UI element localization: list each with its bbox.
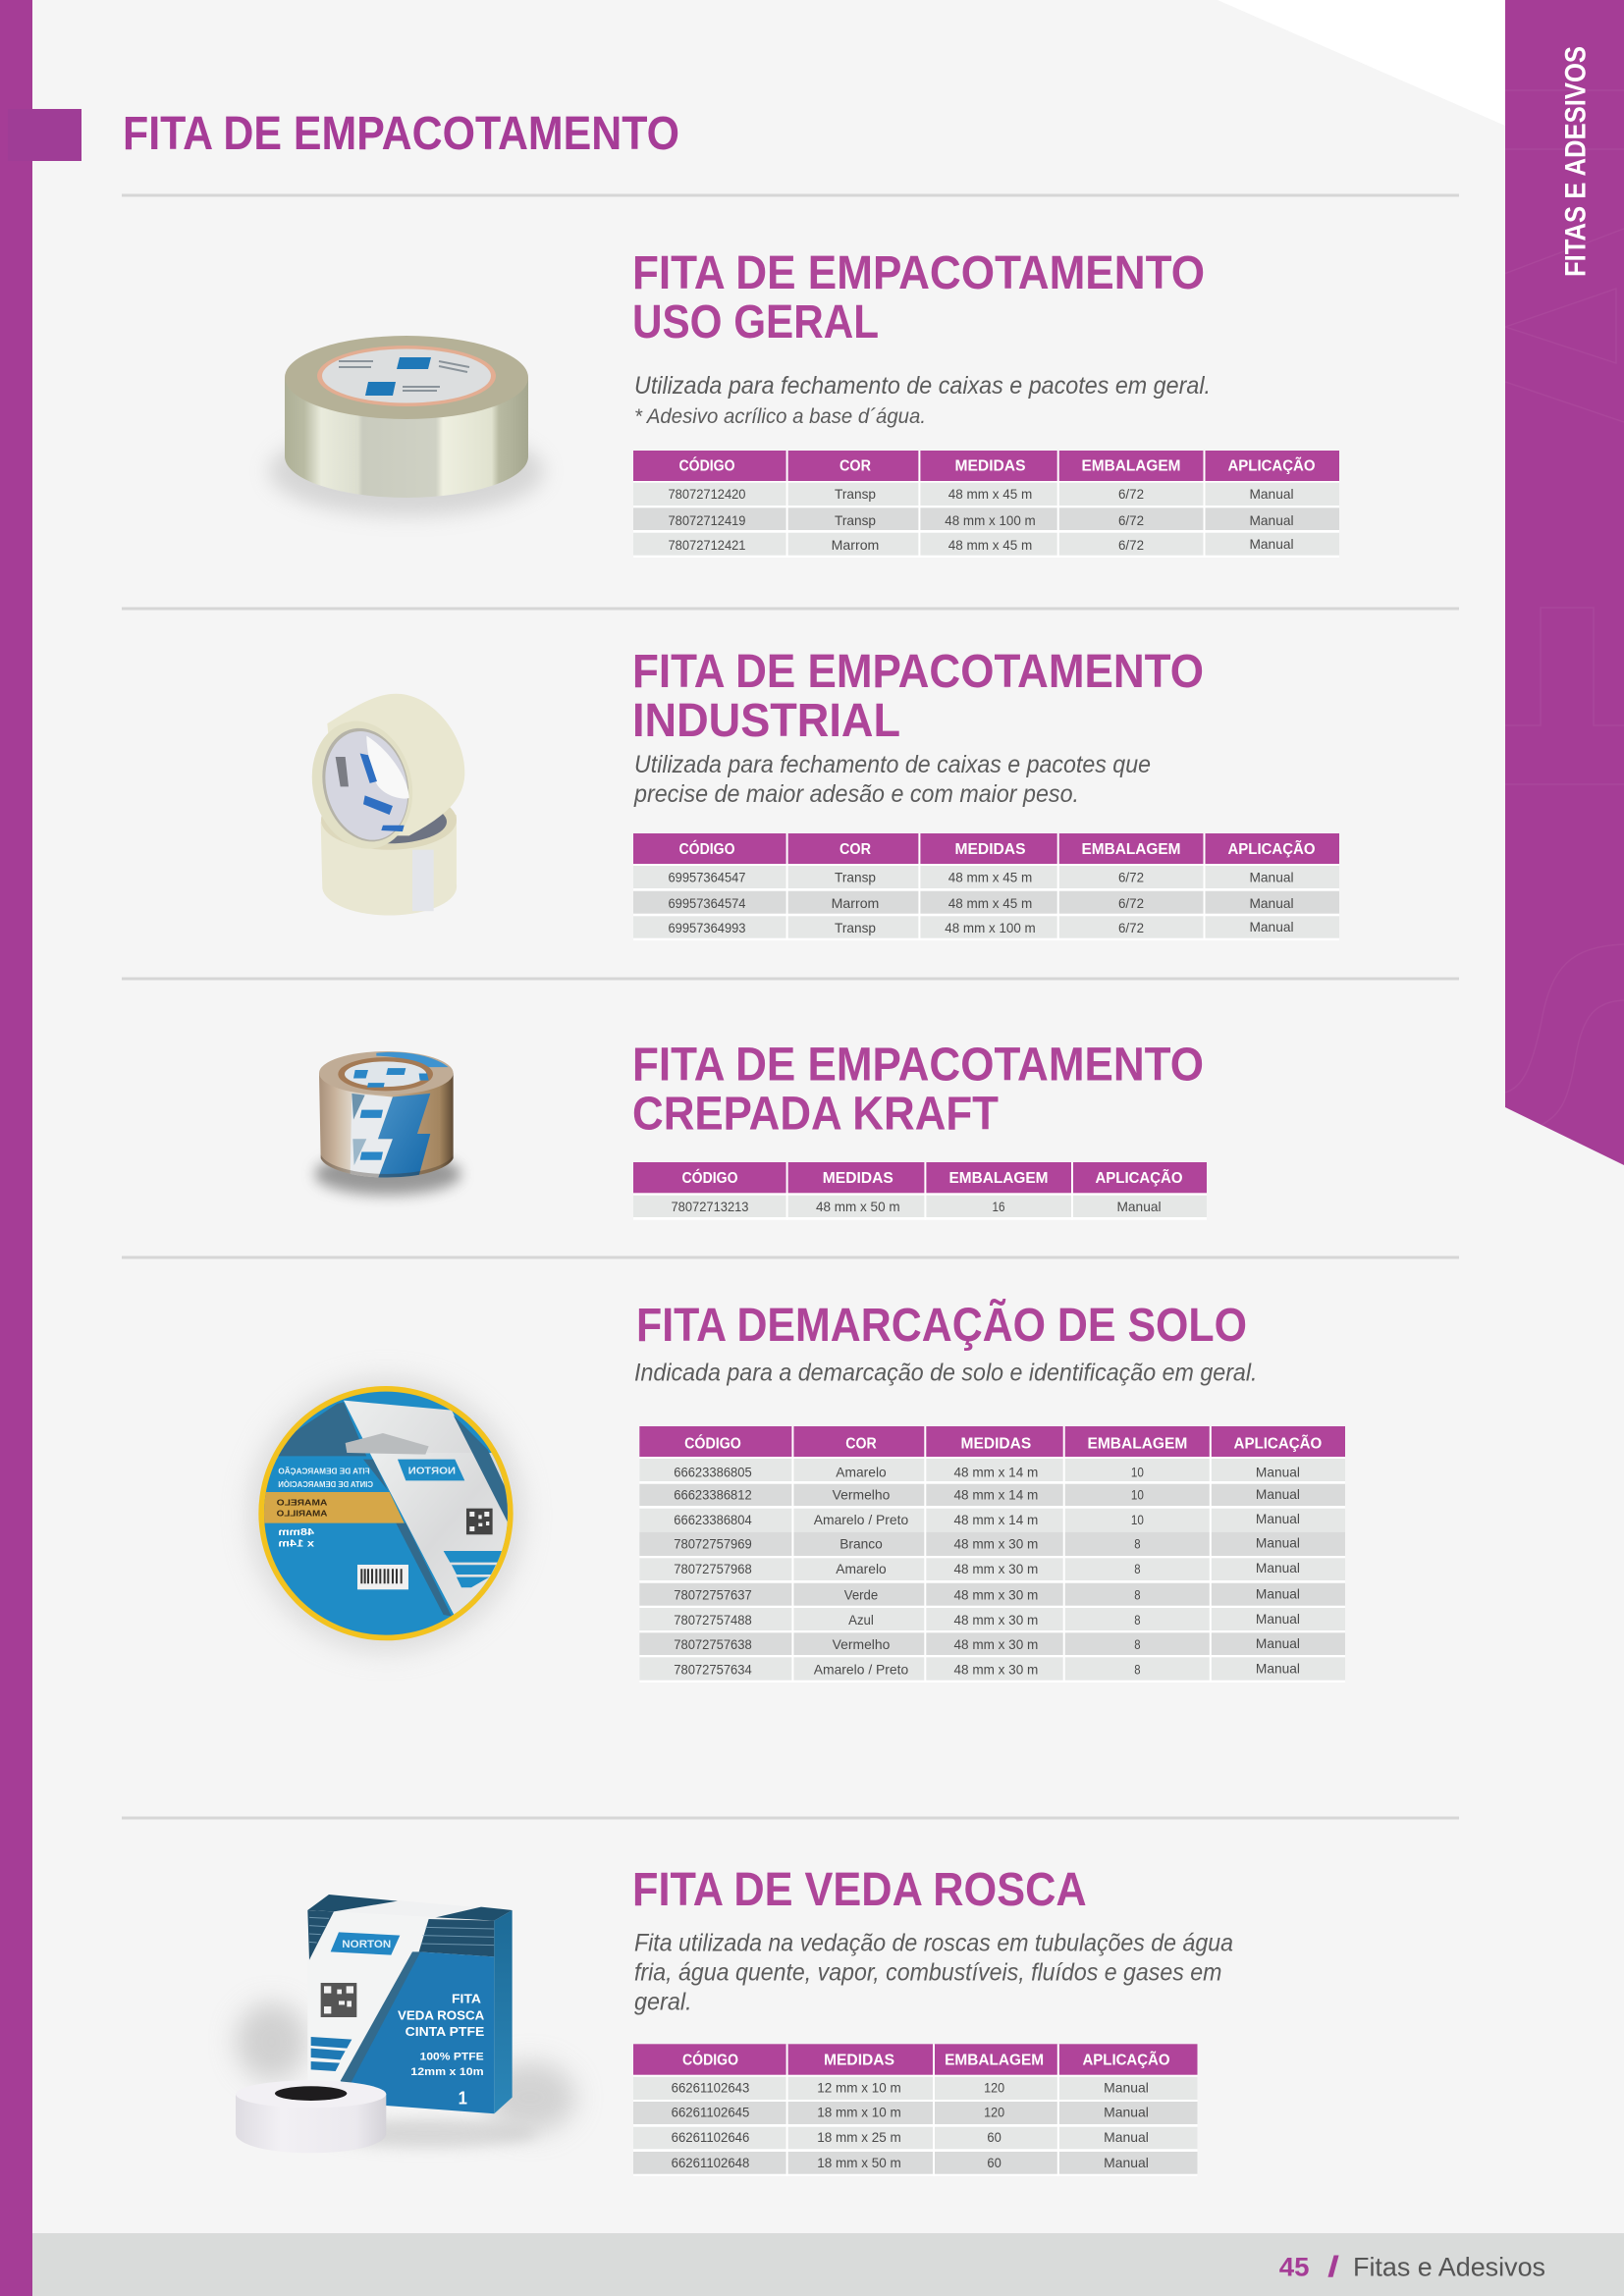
table rows: 18 mm x 50 m <box>817 2155 901 2170</box>
table rows: Manual <box>1104 2104 1149 2119</box>
description: Indicada para a demarcação de solo e identificação em geral. <box>634 1360 1257 1387</box>
table rows: 8 <box>1134 1612 1141 1628</box>
table rows: Manual <box>1256 1635 1300 1651</box>
table rows: 8 <box>1134 1587 1141 1603</box>
table header: APLICAÇÃO <box>1227 455 1316 475</box>
table header: COR <box>845 1436 877 1453</box>
box label text: 12mm x 10m <box>410 2066 484 2078</box>
table header <box>681 1167 1182 1187</box>
table rows: 48 mm x 100 m <box>945 920 1036 935</box>
table header: CÓDIGO <box>681 1168 738 1187</box>
table rows: 6/72 <box>1118 870 1144 885</box>
table header <box>682 2049 1170 2068</box>
table header: MEDIDAS <box>954 841 1026 858</box>
mirrored label text: x 14m <box>278 1538 314 1549</box>
title tab marker <box>8 109 81 161</box>
table rows: Amarelo <box>836 1464 887 1479</box>
product photo: clear tape roll <box>269 336 544 516</box>
table rows: Transp <box>835 486 876 502</box>
table rows: 48 mm x 30 m <box>954 1587 1038 1603</box>
table rows: Marrom <box>832 537 879 553</box>
heading: FITA DE EMPACOTAMENTO <box>632 646 1204 698</box>
table rows: 6/72 <box>1118 895 1144 911</box>
QR code <box>466 1509 493 1534</box>
table rows: Manual <box>1249 870 1294 885</box>
heading: FITA DE EMPACOTAMENTO <box>632 1040 1204 1092</box>
table rows: Manual <box>1256 1511 1300 1526</box>
table rows: 48 mm x 45 m <box>948 486 1032 502</box>
table rows: Amarelo / Preto <box>814 1512 908 1527</box>
product photo: kraft tape roll <box>314 1051 461 1195</box>
white corner triangle <box>1218 0 1624 126</box>
table header: APLICAÇÃO <box>1234 1433 1322 1453</box>
table rows: Manual <box>1249 512 1294 528</box>
table rows: Vermelho <box>833 1487 891 1503</box>
description <box>634 1929 1233 2015</box>
table rows: Manual <box>1249 895 1294 911</box>
mirrored label text: CINTA DE DEMARCACIÓN <box>278 1480 373 1489</box>
table rows: 48 mm x 45 m <box>948 895 1032 911</box>
table header: COR <box>839 457 871 475</box>
table header: EMBALAGEM <box>1082 841 1180 858</box>
table rows: 69957364547 <box>668 870 746 885</box>
table rows: 10 <box>1131 1487 1144 1503</box>
mirrored label text: NORTON <box>408 1466 456 1476</box>
table rows: 60 <box>987 2129 1001 2145</box>
table rows: 78072757637 <box>674 1587 752 1603</box>
table rows: Manual <box>1249 536 1294 552</box>
table rows: Amarelo <box>836 1561 887 1576</box>
table rows: 69957364993 <box>668 920 746 935</box>
table: demarcacao <box>639 1426 1345 1682</box>
table rows: 120 <box>984 2080 1004 2096</box>
description <box>633 751 1151 808</box>
table rows: 8 <box>1134 1561 1141 1576</box>
slash: / <box>1327 2251 1340 2283</box>
table header: COR <box>839 841 871 858</box>
table rows: 18 mm x 25 m <box>817 2129 901 2145</box>
table rows: 6/72 <box>1118 920 1144 935</box>
panel: veda rosca <box>236 1864 1233 2176</box>
table rows: 10 <box>1131 1464 1144 1479</box>
table rows: 12 mm x 10 m <box>817 2080 901 2096</box>
table rows: 69957364574 <box>668 895 746 911</box>
band label: FITAS E ADESIVOS <box>1559 46 1593 277</box>
box label text: CINTA PTFE <box>406 2024 484 2039</box>
table rows: 66261102643 <box>672 2080 750 2096</box>
table header: CÓDIGO <box>679 839 734 858</box>
table rows: 8 <box>1134 1662 1141 1678</box>
table rows: 48 mm x 30 m <box>954 1662 1038 1678</box>
heading: FITA DE VEDA ROSCA <box>632 1864 1087 1916</box>
table rows: Transp <box>835 870 876 885</box>
table header: MEDIDAS <box>954 457 1026 475</box>
panel: demarcacao de solo <box>248 1298 1345 1682</box>
table rows: 18 mm x 10 m <box>817 2104 901 2119</box>
table rows: Manual <box>1249 486 1294 502</box>
table rows: 48 mm x 45 m <box>948 870 1032 885</box>
table rows: 48 mm x 30 m <box>954 1535 1038 1551</box>
table rows: Manual <box>1256 1586 1300 1602</box>
description: precise de maior adesão e com maior peso. <box>633 780 1079 808</box>
table: crepada kraft <box>633 1162 1207 1220</box>
panel: crepada kraft <box>314 1040 1207 1220</box>
box label text: NORTON <box>342 1939 391 1950</box>
table rows: 78072712419 <box>668 512 746 528</box>
table: industrial <box>633 833 1339 940</box>
table header: APLICAÇÃO <box>1082 2049 1170 2068</box>
description: Utilizada para fechamento de caixas e pacotes em geral. <box>634 372 1211 400</box>
heading <box>632 247 1205 348</box>
section name: Fitas e Adesivos <box>1353 2252 1545 2281</box>
table rows: 6/72 <box>1118 512 1144 528</box>
description: * Adesivo acrílico a base d´água. <box>634 405 926 428</box>
table rows <box>668 870 1294 935</box>
table rows: 48 mm x 30 m <box>954 1612 1038 1628</box>
table header <box>679 455 1316 475</box>
heading: FITA DEMARCAÇÃO DE SOLO <box>636 1298 1247 1352</box>
description: Utilizada para fechamento de caixas e pacotes que <box>634 751 1151 778</box>
table rows <box>668 486 1294 553</box>
left purple bar <box>0 0 32 2296</box>
box label text: 1 <box>459 2087 467 2108</box>
table rows: 10 <box>1131 1512 1144 1527</box>
table rows: 8 <box>1134 1535 1141 1551</box>
table rows <box>672 2080 1149 2170</box>
table rows: 66623386804 <box>674 1512 752 1527</box>
table rows: Marrom <box>832 895 879 911</box>
panel: industrial <box>297 646 1339 940</box>
table header <box>679 838 1316 858</box>
table rows: 48 mm x 14 m <box>954 1464 1038 1479</box>
table header <box>684 1433 1322 1453</box>
table rows: 66623386805 <box>674 1464 752 1479</box>
heading: INDUSTRIAL <box>632 695 900 747</box>
table rows: Manual <box>1249 919 1294 934</box>
description: fria, água quente, vapor, combustíveis, fluídos e gases em <box>634 1958 1221 1986</box>
table rows: 48 mm x 50 m <box>816 1199 900 1214</box>
heading: USO GERAL <box>632 296 879 348</box>
table rows: Manual <box>1256 1486 1300 1502</box>
table rows: Manual <box>1104 2155 1149 2170</box>
mirrored label text: FITA DE DEMARCAÇÃO <box>278 1468 370 1476</box>
mirrored label text: AMARILLO <box>276 1508 327 1518</box>
table rows: Manual <box>1256 1560 1300 1575</box>
table rows: Manual <box>1117 1199 1161 1214</box>
table rows: Azul <box>848 1612 874 1628</box>
table rows: 78072757638 <box>674 1636 752 1652</box>
mirrored label text <box>276 1466 456 1549</box>
table header: MEDIDAS <box>961 1436 1032 1453</box>
table: veda rosca <box>633 2044 1198 2176</box>
description: Fita utilizada na vedação de roscas em tubulações de água <box>634 1929 1233 1956</box>
table rows: Manual <box>1104 2080 1149 2096</box>
table rows: 48 mm x 30 m <box>954 1636 1038 1652</box>
heading: CREPADA KRAFT <box>632 1089 999 1141</box>
footer bar <box>32 2233 1624 2296</box>
table header: MEDIDAS <box>824 2052 894 2068</box>
table rows <box>672 1199 1161 1214</box>
table rows: Verde <box>844 1587 878 1603</box>
table rows: 48 mm x 45 m <box>948 537 1032 553</box>
table header: CÓDIGO <box>684 1434 741 1453</box>
table rows: 78072712421 <box>668 537 746 553</box>
page number: 45 <box>1279 2252 1310 2281</box>
table rows: 66623386812 <box>674 1487 752 1503</box>
table rows: Manual <box>1256 1534 1300 1550</box>
table rows: 6/72 <box>1118 537 1144 553</box>
table rows: 120 <box>984 2104 1004 2119</box>
right side band <box>1505 0 1624 1165</box>
table header: EMBALAGEM <box>945 2052 1044 2068</box>
table rows: Manual <box>1104 2129 1149 2145</box>
table rows: Manual <box>1256 1611 1300 1627</box>
table header: APLICAÇÃO <box>1227 838 1316 858</box>
table rows: 16 <box>992 1199 1005 1214</box>
table rows: 78072713213 <box>672 1199 749 1214</box>
box label text: 100% PTFE <box>420 2052 484 2063</box>
table rows: 78072757969 <box>674 1535 752 1551</box>
QR code <box>321 1983 356 2017</box>
table rows: 6/72 <box>1118 486 1144 502</box>
description <box>634 372 1211 428</box>
table header: EMBALAGEM <box>948 1170 1049 1187</box>
table rows: 48 mm x 100 m <box>945 512 1036 528</box>
table rows: Manual <box>1256 1464 1300 1479</box>
table header: EMBALAGEM <box>1088 1436 1187 1453</box>
product photo: yellow floor marking tape <box>248 1377 523 1652</box>
product photo: two stacked clear tape rolls <box>297 694 464 916</box>
table header: MEDIDAS <box>823 1170 893 1187</box>
heading <box>632 1040 1204 1141</box>
table rows: 48 mm x 14 m <box>954 1512 1038 1527</box>
mirrored label text: 48mm <box>278 1527 314 1538</box>
main title: FITA DE EMPACOTAMENTO <box>123 108 679 160</box>
table rows: 66261102646 <box>672 2129 750 2145</box>
table header: EMBALAGEM <box>1082 457 1180 475</box>
panel: uso geral <box>269 247 1339 558</box>
table rows: 66261102645 <box>672 2104 750 2119</box>
mirrored label text: AMARELO <box>276 1498 327 1508</box>
heading <box>632 646 1204 747</box>
box label text: FITA <box>452 1992 481 2006</box>
heading: FITA DE EMPACOTAMENTO <box>632 247 1205 299</box>
table rows: 78072757968 <box>674 1561 752 1576</box>
table header: CÓDIGO <box>682 2050 738 2068</box>
table: uso geral <box>633 451 1339 558</box>
table rows: Transp <box>835 512 876 528</box>
box label text <box>342 1939 485 2108</box>
barcode <box>357 1565 408 1589</box>
table rows: Amarelo / Preto <box>814 1662 908 1678</box>
table rows: Vermelho <box>833 1636 891 1652</box>
table rows: 78072757634 <box>674 1662 752 1678</box>
table header: APLICAÇÃO <box>1096 1167 1182 1187</box>
table rows: 78072757488 <box>674 1612 752 1628</box>
table rows <box>674 1464 1300 1678</box>
product photo: box and white PTFE roll <box>236 1895 576 2153</box>
table rows: 8 <box>1134 1636 1141 1652</box>
table header: CÓDIGO <box>679 455 734 475</box>
table rows: Branco <box>839 1535 883 1551</box>
table rows: Transp <box>835 920 876 935</box>
table rows: 78072712420 <box>668 486 746 502</box>
description: geral. <box>634 1988 692 2015</box>
table rows: 48 mm x 14 m <box>954 1487 1038 1503</box>
box label text: VEDA ROSCA <box>398 2007 485 2022</box>
table rows: 60 <box>987 2155 1001 2170</box>
table rows: Manual <box>1256 1661 1300 1677</box>
table rows: 66261102648 <box>672 2155 750 2170</box>
table rows: 48 mm x 30 m <box>954 1561 1038 1576</box>
